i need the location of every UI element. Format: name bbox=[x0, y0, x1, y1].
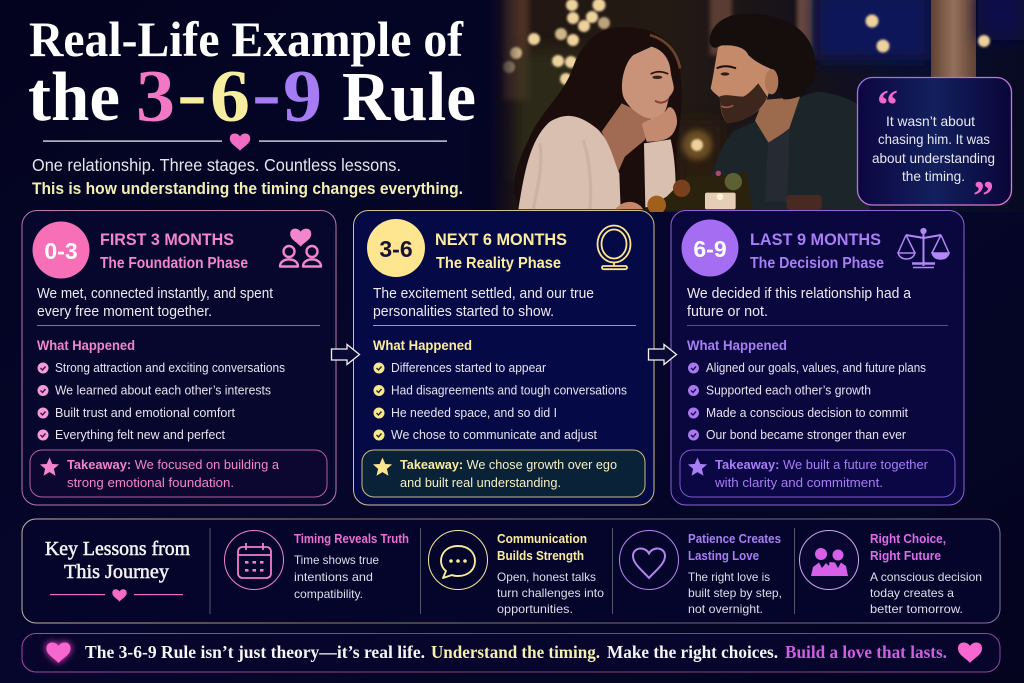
what happened list: He needed space, and so did I bbox=[391, 406, 557, 420]
photo: couple at candlelit dinner bbox=[470, 0, 1024, 214]
description bbox=[687, 286, 912, 320]
man: shirt bbox=[703, 92, 870, 210]
closing text: The 3-6-9 Rule isn’t just theory—it’s real life. bbox=[85, 642, 425, 662]
lesson 2 bbox=[428, 530, 604, 616]
phase heading bbox=[750, 230, 884, 272]
subtitle: One relationship. Three stages. Countless lessons. bbox=[32, 155, 401, 175]
quote callout: “ bbox=[877, 83, 898, 129]
title: Rule bbox=[342, 59, 476, 136]
lesson 3 text: Lasting Love bbox=[688, 549, 759, 563]
lesson 3 text: not overnight. bbox=[688, 602, 763, 616]
phase heading: The Reality Phase bbox=[436, 255, 561, 272]
lesson 4 bbox=[800, 530, 982, 616]
phase heading bbox=[100, 230, 248, 272]
key lessons heading: Key Lessons from bbox=[45, 538, 190, 560]
lesson 1 text: intentions and bbox=[294, 570, 373, 584]
man: neck bbox=[755, 97, 800, 144]
arrow: first to next phase bbox=[332, 344, 360, 364]
lesson 2 text: Builds Strength bbox=[497, 549, 584, 563]
lesson 1 bbox=[224, 530, 409, 601]
title: 6 bbox=[210, 56, 250, 138]
what happened list: Differences started to appear bbox=[391, 361, 546, 375]
what happened list: Had disagreements and tough conversations bbox=[391, 384, 627, 398]
icon: speech bubble bbox=[428, 530, 488, 590]
icon: couple with heart bbox=[280, 229, 321, 266]
lesson 1 text bbox=[294, 532, 409, 601]
badge 0-3: 0-3 bbox=[44, 238, 78, 264]
icon: heart right bbox=[958, 643, 982, 663]
woman: arm and hand bbox=[644, 139, 676, 207]
title divider with heart bbox=[43, 133, 447, 151]
description bbox=[373, 286, 594, 320]
phase heading: NEXT 6 MONTHS bbox=[435, 230, 567, 249]
badge 3-6: 3-6 bbox=[379, 236, 413, 262]
lesson 3 bbox=[620, 530, 782, 616]
woman: neck and chest bbox=[602, 103, 650, 172]
badge 6-9 bbox=[682, 220, 738, 276]
takeaway: strong emotional foundation. bbox=[67, 475, 234, 490]
lesson 2 text bbox=[497, 532, 604, 616]
icon: heart outline bbox=[620, 530, 678, 590]
panel: key lessons bbox=[22, 519, 1000, 623]
lesson 1 text: Time shows true bbox=[294, 553, 379, 567]
phase heading: FIRST 3 MONTHS bbox=[100, 230, 234, 249]
closing text: Understand the timing. bbox=[431, 642, 600, 662]
badge 6-9: 6-9 bbox=[693, 236, 727, 262]
arrow: next to last phase bbox=[648, 344, 676, 364]
phase heading: LAST 9 MONTHS bbox=[750, 230, 881, 249]
what happened list: Built trust and emotional comfort bbox=[55, 406, 236, 420]
lesson 3 text: Patience Creates bbox=[688, 532, 781, 546]
lesson 4 text: better tomorrow. bbox=[870, 602, 963, 616]
key lessons heading bbox=[45, 538, 190, 602]
lesson 3 text bbox=[688, 532, 782, 616]
what happened list: We chose to communicate and adjust bbox=[391, 428, 598, 442]
what happened list: What Happened bbox=[37, 337, 135, 353]
description: every free moment together. bbox=[37, 304, 212, 320]
what happened list bbox=[373, 337, 627, 442]
what happened list: What Happened bbox=[687, 337, 787, 353]
what happened list: What Happened bbox=[373, 337, 472, 353]
lesson 2 text: Communication bbox=[497, 532, 587, 546]
takeaway: Takeaway: We focused on building a bbox=[67, 457, 280, 472]
lesson 4 text bbox=[870, 532, 982, 616]
what happened list bbox=[37, 337, 285, 442]
closing message bar bbox=[22, 634, 1000, 672]
lesson 4 text: Right Choice, bbox=[870, 532, 946, 546]
lesson 3 text: The right love is bbox=[688, 570, 770, 584]
description: future or not. bbox=[687, 304, 768, 320]
description: personalities started to show. bbox=[373, 304, 554, 320]
title bbox=[28, 11, 476, 138]
quote callout: the timing. bbox=[902, 168, 965, 184]
icon: calendar bbox=[224, 530, 284, 590]
what happened list: Aligned our goals, values, and future plans bbox=[706, 361, 926, 375]
icon: scales bbox=[898, 229, 949, 268]
lesson 4 text: today creates a bbox=[870, 586, 954, 600]
what happened list: Everything felt new and perfect bbox=[55, 428, 226, 442]
takeaway: with clarity and commitment. bbox=[714, 475, 883, 490]
takeaway: Takeaway: We chose growth over ego bbox=[400, 457, 617, 472]
phase heading: The Decision Phase bbox=[750, 255, 884, 272]
what happened list: Our bond became stronger than ever bbox=[706, 428, 906, 442]
description: The excitement settled, and our true bbox=[373, 286, 594, 302]
subtitle: This is how understanding the timing changes everything. bbox=[32, 179, 463, 198]
quote callout: about understanding bbox=[872, 150, 995, 166]
panel: next 6 months bbox=[354, 210, 654, 505]
takeaway bbox=[30, 450, 327, 497]
man: face bbox=[711, 43, 777, 123]
closing text: Make the right choices. bbox=[607, 642, 778, 662]
what happened list bbox=[687, 337, 926, 442]
description: We met, connected instantly, and spent bbox=[37, 286, 273, 302]
quote callout: It wasn’t about bbox=[886, 113, 975, 129]
takeaway: and built real understanding. bbox=[400, 475, 561, 490]
title: 9 bbox=[283, 56, 322, 138]
icon: couple silhouettes bbox=[800, 530, 858, 590]
woman: sweater bbox=[518, 116, 621, 209]
lesson 3 text: built step by step, bbox=[688, 586, 782, 600]
badge 0-3 bbox=[32, 222, 90, 278]
title: - bbox=[177, 53, 207, 135]
woman: hair bbox=[514, 27, 682, 210]
subtitle bbox=[32, 155, 463, 198]
title: Real-Life Example of bbox=[29, 11, 464, 67]
closing text: Build a love that lasts. bbox=[785, 642, 947, 662]
takeaway bbox=[680, 450, 955, 497]
takeaway: Takeaway: We built a future together bbox=[715, 457, 929, 472]
phase heading: The Foundation Phase bbox=[100, 255, 248, 272]
lesson 2 text: Open, honest talks bbox=[497, 570, 596, 584]
title: - bbox=[252, 53, 281, 135]
man: hair bbox=[709, 14, 815, 99]
panel: last 9 months bbox=[671, 210, 964, 505]
what happened list: Strong attraction and exciting conversations bbox=[55, 361, 285, 375]
icon: mirror bbox=[598, 226, 630, 269]
panel: first 3 months bbox=[22, 210, 336, 505]
lesson 1 text: compatibility. bbox=[294, 587, 363, 601]
lesson 2 text: turn challenges into bbox=[497, 586, 604, 600]
key lessons heading: This Journey bbox=[64, 561, 169, 583]
lesson 4 text: Right Future bbox=[870, 549, 941, 563]
what happened list: Supported each other’s growth bbox=[706, 384, 871, 398]
icon: glowing heart left bbox=[46, 642, 71, 664]
quote callout: ” bbox=[973, 174, 994, 220]
title: 3 bbox=[136, 56, 175, 138]
what happened list: We learned about each other’s interests bbox=[55, 384, 271, 398]
description: We decided if this relationship had a bbox=[687, 286, 912, 302]
what happened list: Made a conscious decision to commit bbox=[706, 406, 909, 420]
takeaway bbox=[362, 450, 645, 497]
quote callout: chasing him. It was bbox=[878, 131, 990, 147]
badge 3-6 bbox=[367, 219, 425, 277]
title: the bbox=[28, 59, 120, 136]
phase heading bbox=[435, 230, 567, 272]
table items bbox=[643, 172, 753, 210]
lesson 2 text: opportunities. bbox=[497, 602, 573, 616]
lesson 4 text: A conscious decision bbox=[870, 570, 982, 584]
woman: face bbox=[622, 47, 674, 119]
lesson 1 text: Timing Reveals Truth bbox=[294, 532, 409, 546]
description bbox=[37, 286, 273, 320]
closing text bbox=[85, 642, 947, 662]
quote callout bbox=[858, 78, 1012, 220]
